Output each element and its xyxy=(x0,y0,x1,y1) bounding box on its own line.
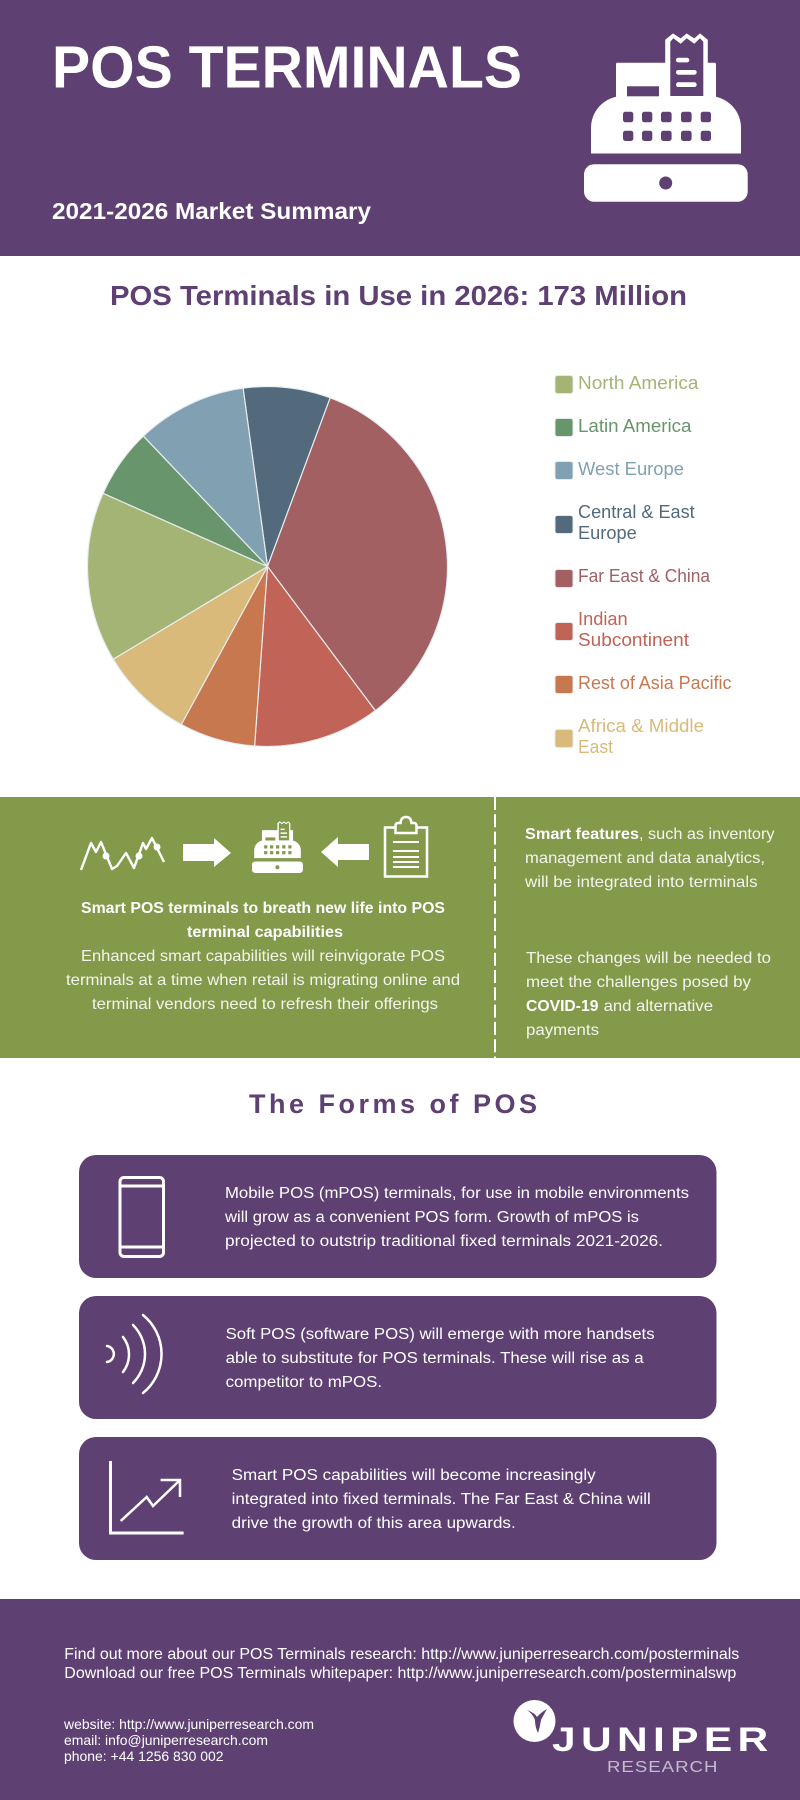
text: contact details: email: info@juniperresearch.com xyxy=(64,1732,268,1748)
icon: small cash register xyxy=(252,821,303,873)
title: POS TERMINALS xyxy=(52,34,522,100)
arrow: left xyxy=(321,837,369,867)
text: contact details xyxy=(63,1716,314,1764)
text: research links: Find out more about our POS Terminals research: http://www.juniperresearch.com/posterminals xyxy=(64,1646,739,1663)
legend item: Africa and Middle East: Africa & Middle xyxy=(578,716,704,736)
text: soft POS xyxy=(226,1326,655,1391)
text: contact details: website: http://www.juniperresearch.com xyxy=(63,1716,314,1732)
icon: mobile phone xyxy=(120,1178,164,1256)
legend item: North America: North America xyxy=(578,373,700,393)
text block: smart features: management and data analytics, xyxy=(525,850,765,867)
text: research links: Download our free POS Terminals whitepaper: http://www.juniperresearch.com/posterminalswp xyxy=(64,1665,736,1682)
logo: Juniper Research: JUNIPER xyxy=(552,1721,768,1759)
text block: smart POS terminals: terminals at a time when retail is migrating online and xyxy=(66,972,460,989)
text block: COVID-19 challenges xyxy=(526,950,771,1039)
icon: rising chart xyxy=(110,1461,184,1533)
icon: contactless waves xyxy=(107,1315,162,1393)
text block: smart POS terminals: terminal capabilities xyxy=(187,924,343,941)
text block: COVID-19 challenges: These changes will be needed to xyxy=(526,950,771,967)
legend item: Indian Subcontinent: Subcontinent xyxy=(578,630,689,650)
text block: smart POS terminals: Smart POS terminals to breath new life into POS xyxy=(81,900,445,917)
legend item: West Europe: West Europe xyxy=(578,459,684,479)
legend item: Central and East Europe: Europe xyxy=(578,523,637,543)
text block: COVID-19 challenges: payments xyxy=(526,1022,599,1039)
text: mobile POS: Mobile POS (mPOS) terminals, for use in mobile environments xyxy=(225,1185,689,1202)
icon: clipboard xyxy=(385,817,427,876)
text block: smart features: Smart features xyxy=(525,826,639,843)
icon: line chart xyxy=(81,838,164,870)
text block: COVID-19 challenges: meet the challenges posed by xyxy=(526,974,751,991)
text block: smart features xyxy=(524,826,774,891)
legend item: Africa and Middle East xyxy=(555,716,704,757)
logo: Juniper Research xyxy=(514,1700,768,1776)
arrow: right xyxy=(183,838,231,867)
text: mobile POS: projected to outstrip traditional fixed terminals 2021-2026. xyxy=(225,1233,663,1250)
text: smart POS xyxy=(232,1467,651,1532)
panel: mobile POS card xyxy=(79,1155,716,1278)
heading: the forms of POS: The Forms of POS xyxy=(249,1089,537,1119)
legend item: Latin America: Latin America xyxy=(578,416,692,436)
text block: smart POS terminals xyxy=(66,900,460,1013)
text: contact details: phone: +44 1256 830 002 xyxy=(64,1748,224,1764)
text: research links xyxy=(64,1646,739,1682)
panel: smart POS band xyxy=(0,797,800,1058)
legend item: Africa and Middle East: East xyxy=(578,737,613,757)
legend item: Far East and China: Far East & China xyxy=(578,566,711,586)
heading: POS terminals in use: POS Terminals in Use in 2026: 173 Million xyxy=(110,280,687,311)
text block: COVID-19 challenges: and alternative xyxy=(604,998,713,1015)
pie chart: POS terminals by region xyxy=(88,387,447,746)
text: smart POS: Smart POS capabilities will become increasingly xyxy=(232,1467,596,1484)
legend item: Rest of Asia Pacific: Rest of Asia Pacific xyxy=(578,673,732,693)
icon: cash register xyxy=(584,34,748,202)
text: soft POS: competitor to mPOS. xyxy=(226,1374,382,1391)
text block: smart features: , such as inventory xyxy=(639,826,774,843)
text block: smart POS terminals: Enhanced smart capabilities will reinvigorate POS xyxy=(81,948,445,965)
text block: smart POS terminals: terminal vendors need to refresh their offerings xyxy=(92,996,438,1013)
legend item: Indian Subcontinent: Indian xyxy=(578,609,628,629)
panel: footer xyxy=(0,1599,800,1800)
text block: COVID-19 challenges: COVID-19 xyxy=(526,998,599,1015)
legend xyxy=(555,373,732,757)
legend item: Central and East Europe: Central & East xyxy=(578,502,695,522)
text: soft POS: Soft POS (software POS) will emerge with more handsets xyxy=(226,1326,655,1343)
subtitle: 2021-2026 Market Summary xyxy=(52,198,371,224)
logo: Juniper Research: RESEARCH xyxy=(607,1758,717,1776)
text: mobile POS xyxy=(224,1185,689,1250)
text: soft POS: able to substitute for POS terminals. These will rise as a xyxy=(226,1350,644,1367)
panel: header xyxy=(0,0,800,256)
panel: smart POS card xyxy=(79,1437,716,1560)
legend item: Central and East Europe xyxy=(555,502,695,543)
text: smart POS: integrated into fixed terminals. The Far East & China will xyxy=(232,1491,651,1508)
text block: smart features: will be integrated into terminals xyxy=(524,874,758,891)
text: mobile POS: will grow as a convenient POS form. Growth of mPOS is xyxy=(224,1209,639,1226)
legend item: Indian Subcontinent xyxy=(555,609,689,650)
panel: soft POS card xyxy=(79,1296,716,1419)
text: smart POS: drive the growth of this area upwards. xyxy=(232,1515,516,1532)
